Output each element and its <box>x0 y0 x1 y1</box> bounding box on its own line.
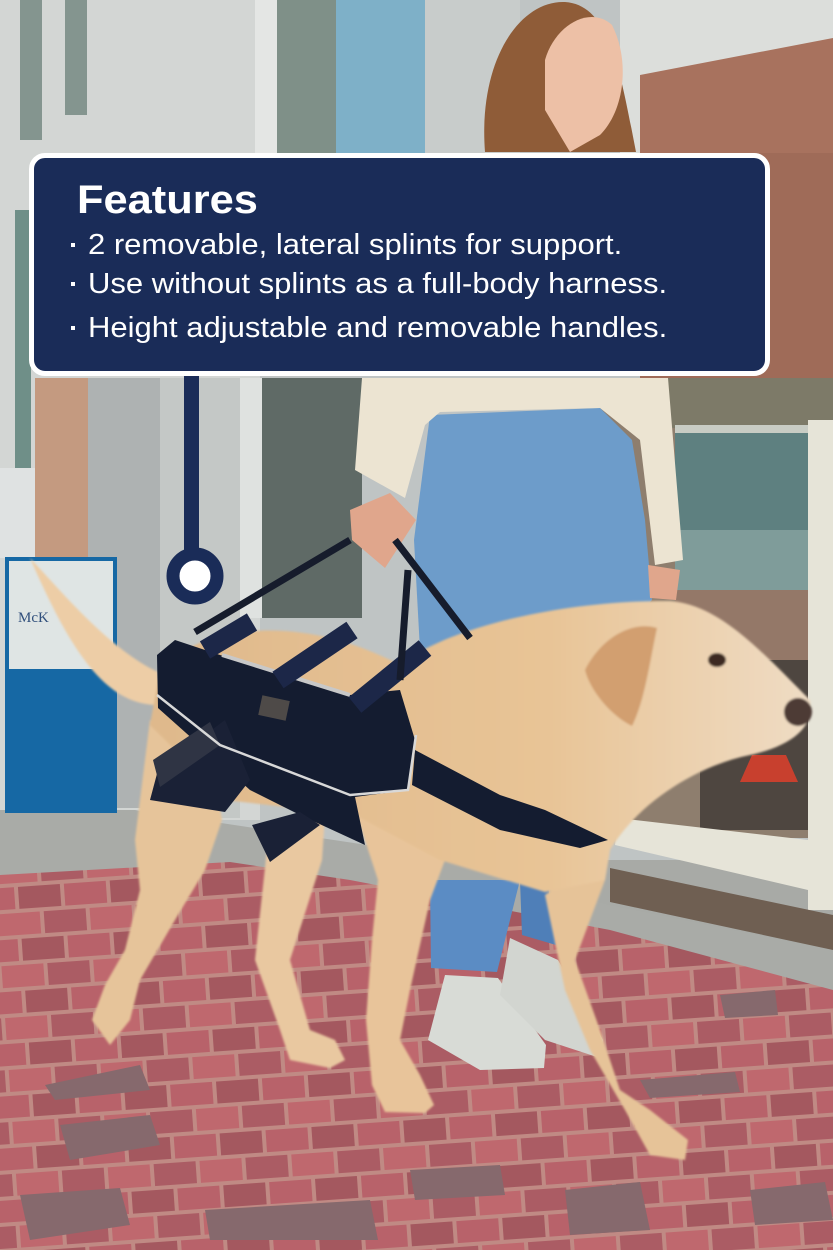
body and head <box>150 601 811 892</box>
harness <box>150 540 608 862</box>
grey paving bricks <box>20 990 833 1240</box>
hind leg rear <box>92 720 222 1045</box>
front leg left <box>355 810 445 1113</box>
dog <box>30 558 812 1160</box>
ear <box>585 626 657 726</box>
bullet: harness: Use without splints as a full-body harness. <box>88 268 667 300</box>
blue sign box <box>5 557 117 813</box>
front leg right <box>545 850 688 1160</box>
bullet: splints: 2 removable, lateral splints for support. <box>88 229 622 261</box>
eye <box>708 653 726 667</box>
person: head <box>484 2 636 152</box>
person: legs and sweater <box>350 378 683 1070</box>
panel: features <box>29 153 770 376</box>
tail <box>30 558 158 705</box>
heading: Features: Features <box>77 178 258 222</box>
hind leg near <box>255 815 345 1068</box>
bullet: handles: Height adjustable and removable handles. <box>88 312 667 344</box>
brick pavement <box>0 862 833 1250</box>
callout connector line <box>173 376 217 598</box>
nose <box>784 698 812 726</box>
sidewalk <box>0 810 833 992</box>
dark curb band <box>610 868 833 950</box>
blue sign box: McK <box>18 610 49 626</box>
